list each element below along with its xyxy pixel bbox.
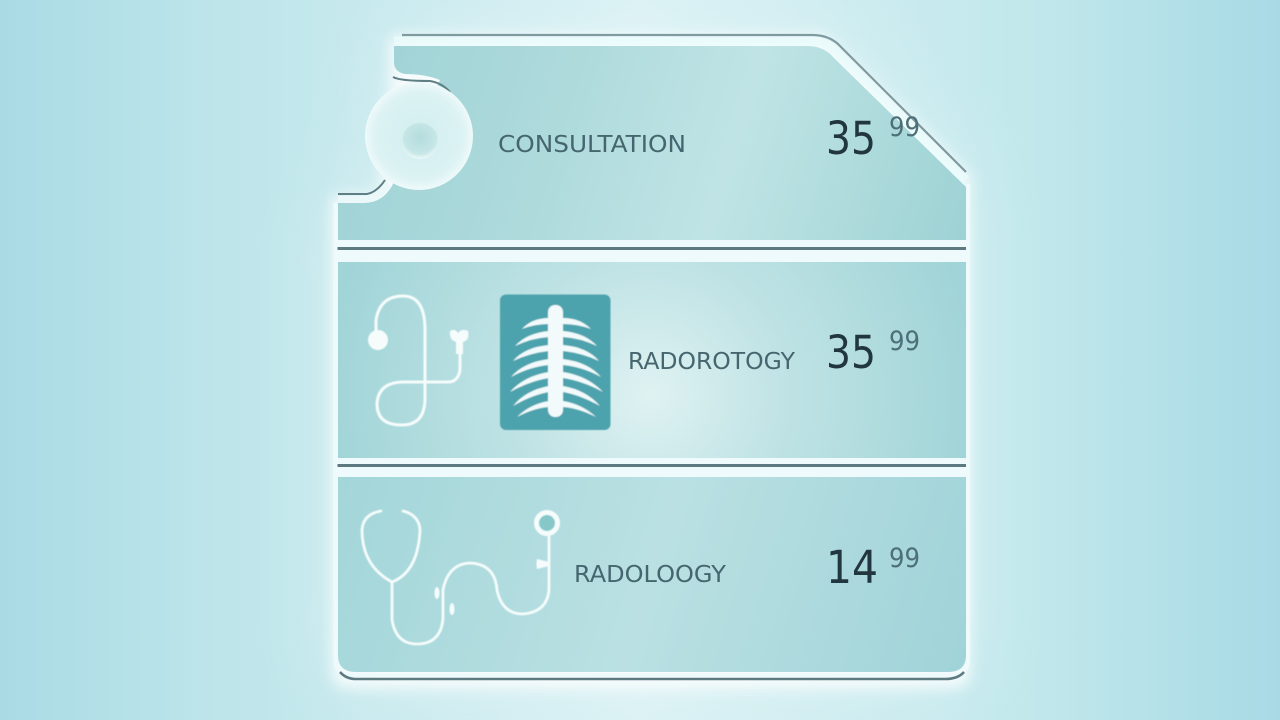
- bottom outline: [340, 672, 964, 679]
- icon: consultation disc: [365, 82, 473, 190]
- label: consultation: CONSULTATION: [498, 130, 686, 158]
- icon: stethoscope tube: [368, 296, 468, 425]
- price: 35 99: 35: [826, 326, 876, 379]
- panel outline: [402, 35, 966, 172]
- price: 14 99: 99: [889, 543, 920, 574]
- icon: x-ray ribs: [500, 294, 610, 430]
- left notch bevel: [338, 185, 388, 199]
- card near glow: [332, 36, 970, 688]
- left notch line: [338, 180, 385, 194]
- price: 35 99: [826, 112, 920, 165]
- upper white bevel: [394, 41, 966, 180]
- card frame bevel: [336, 184, 968, 675]
- price: 35 99: [826, 326, 920, 379]
- card wide glow: [334, 38, 968, 684]
- divider 1: [336, 240, 968, 262]
- price: 35 99: 35: [826, 112, 876, 165]
- price: 35 99: 99: [889, 326, 920, 357]
- label: radoloogy: RADOLOOGY: [574, 560, 727, 588]
- icon: stethoscope: [362, 511, 558, 644]
- panel: radiology lower: [338, 477, 966, 672]
- panel fill: [338, 262, 966, 458]
- panel: radiology: [338, 262, 966, 458]
- price: 14 99: 14: [826, 541, 878, 594]
- panel fill: [338, 477, 966, 672]
- panel fill: [338, 46, 966, 240]
- panel: consultation: [338, 35, 966, 240]
- divider 2: [336, 458, 968, 477]
- price: 35 99: 99: [889, 112, 920, 143]
- label: radorotogy: RADOROTOGY: [628, 347, 796, 375]
- notch shadow: [393, 77, 450, 92]
- price: 14 99: [826, 541, 920, 594]
